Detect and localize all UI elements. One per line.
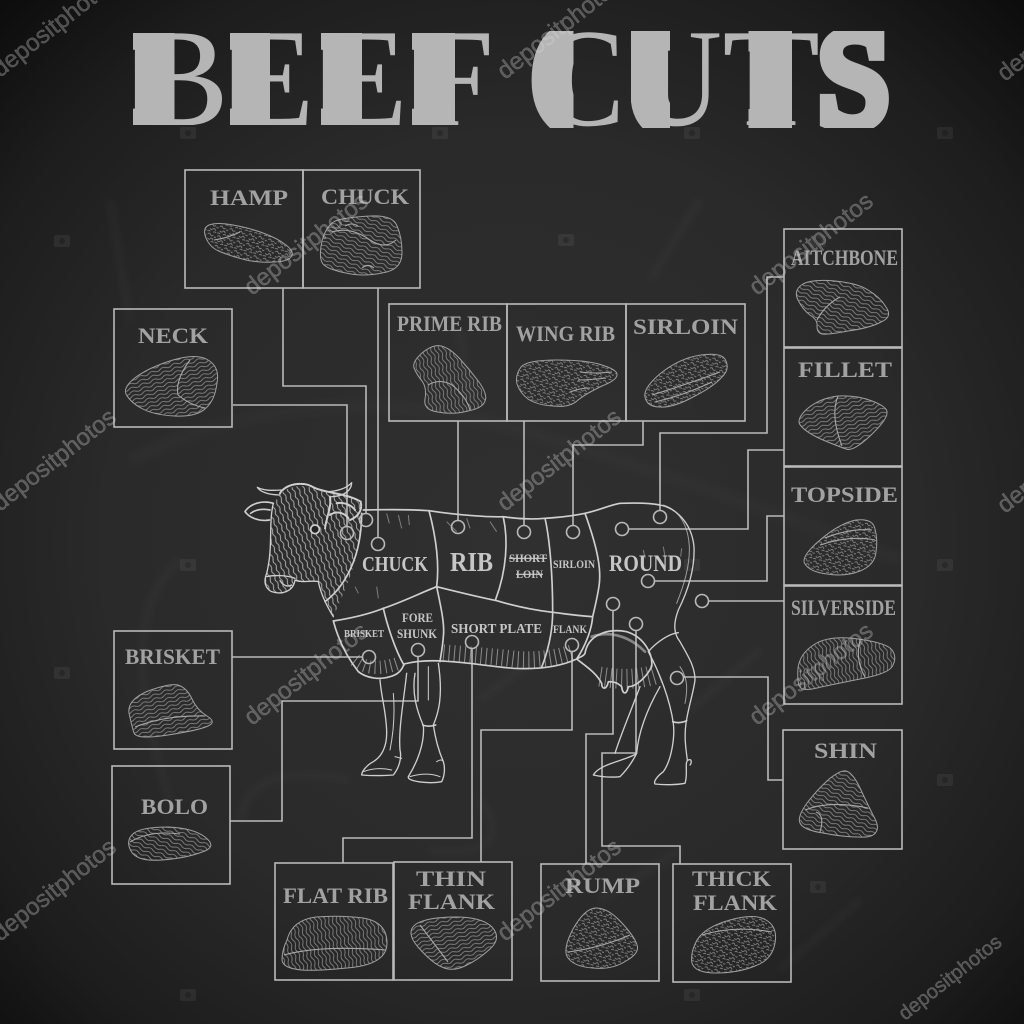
panel: topside: [784, 467, 902, 585]
cow region labels: SHORT: [509, 551, 547, 565]
stock watermarks: depositphotos: [492, 833, 626, 947]
icon: chuck cut: [320, 216, 402, 275]
title: E: [320, 0, 408, 156]
stock watermarks: depositphotos: [239, 617, 373, 731]
icon: wing rib cut: [516, 360, 617, 406]
panel: neck: NECK: [138, 323, 208, 348]
icon: thin flank cut: [411, 917, 497, 969]
panel: sirloin: [626, 304, 745, 421]
title: U: [630, 1, 722, 155]
stock watermarks: depositphotos: [492, 403, 626, 517]
panel: flat rib: FLAT RIB: [283, 883, 388, 908]
cow region labels: LOIN: [516, 567, 543, 581]
panel: flat rib: [275, 863, 393, 980]
icon: flat rib cut: [282, 916, 387, 970]
icon: bolo cut: [129, 827, 211, 860]
panel: thin flank: THIN: [416, 866, 486, 891]
panel: bolo: BOLO: [141, 794, 208, 819]
icon: hamp cut: [205, 224, 292, 262]
panel: fillet: FILLET: [798, 357, 892, 382]
title: C: [540, 1, 625, 155]
cut lines: [325, 503, 660, 678]
panel: thick flank: FLANK: [693, 890, 777, 915]
panel: rump: [541, 864, 659, 981]
title: [133, 31, 889, 128]
panel: hamp: HAMP: [210, 185, 288, 210]
icon: silverside cut: [798, 638, 895, 690]
panel: rump: RUMP: [565, 873, 640, 898]
panel: sirloin: SIRLOIN: [633, 314, 738, 339]
cow region labels: BRISKET: [344, 628, 385, 640]
circle markers: [340, 510, 708, 684]
icon: fillet cut: [799, 396, 887, 449]
cow front legs: [362, 663, 444, 783]
cow head: [245, 483, 362, 617]
icon: topside cut: [804, 520, 877, 575]
panel: chuck: [303, 170, 420, 288]
panel: aitchbone: [784, 229, 902, 347]
cow region labels: RIB: [450, 547, 493, 577]
icon: rump cut: [566, 908, 638, 968]
stock watermarks: depositphotos: [744, 617, 878, 731]
title: E: [229, 1, 315, 156]
cow hair strokes: [355, 513, 682, 679]
stock watermarks: depositphotos: [239, 187, 373, 301]
cow udder: [577, 631, 652, 693]
panel: shin: [783, 730, 902, 849]
panel: topside: TOPSIDE: [791, 482, 898, 507]
connector lines: [230, 277, 784, 864]
panel: thick flank: [673, 864, 791, 982]
icon: shin cut: [799, 771, 877, 837]
icon: thick flank cut: [692, 916, 776, 973]
title: B: [132, 1, 229, 155]
panel: thin flank: [394, 862, 512, 980]
cow region labels: FLANK: [553, 622, 588, 636]
cow illustration: [245, 483, 695, 785]
panel: fillet: [784, 348, 902, 466]
icon: sirloin cut: [645, 354, 727, 407]
icon: prime rib cut: [414, 346, 486, 413]
panel: wing rib: [507, 304, 626, 421]
cow region labels: SHUNK: [397, 626, 438, 641]
panel: wing rib: WING RIB: [516, 321, 615, 346]
stock watermarks: depositphotos: [895, 931, 1006, 1024]
icon: aitchbone cut: [796, 280, 889, 334]
cow region labels: CHUCK: [362, 552, 429, 576]
cow hindquarter outline: [593, 505, 695, 785]
panel: shin: SHIN: [814, 738, 877, 763]
panel: brisket: BRISKET: [125, 644, 220, 669]
panel: thin flank: FLANK: [408, 889, 495, 914]
cow region labels: [344, 547, 682, 641]
stock watermarks: depositphotos: [744, 187, 878, 301]
panel: prime rib: [389, 304, 507, 421]
title: F: [411, 1, 494, 156]
panel: thick flank: THICK: [692, 866, 771, 891]
panel: aitchbone: AITCHBONE: [791, 245, 898, 270]
panel: neck: [114, 309, 232, 427]
panel: silverside: [784, 586, 902, 704]
cow region labels: SHORT PLATE: [451, 622, 542, 637]
title: S: [817, 0, 891, 156]
panel: brisket: [114, 631, 232, 749]
panel: silverside: SILVERSIDE: [791, 595, 896, 620]
icon: brisket cut: [129, 685, 212, 737]
panel: chuck: CHUCK: [321, 184, 409, 209]
panel: hamp: [185, 170, 303, 288]
cow region labels: SIRLOIN: [553, 557, 595, 571]
cow region labels: ROUND: [609, 551, 682, 576]
title: T: [722, 1, 820, 156]
icon: neck cut: [125, 356, 218, 416]
cow region labels: FORE: [402, 610, 433, 625]
panel: bolo: [112, 766, 230, 884]
panel: prime rib: PRIME RIB: [397, 311, 502, 336]
